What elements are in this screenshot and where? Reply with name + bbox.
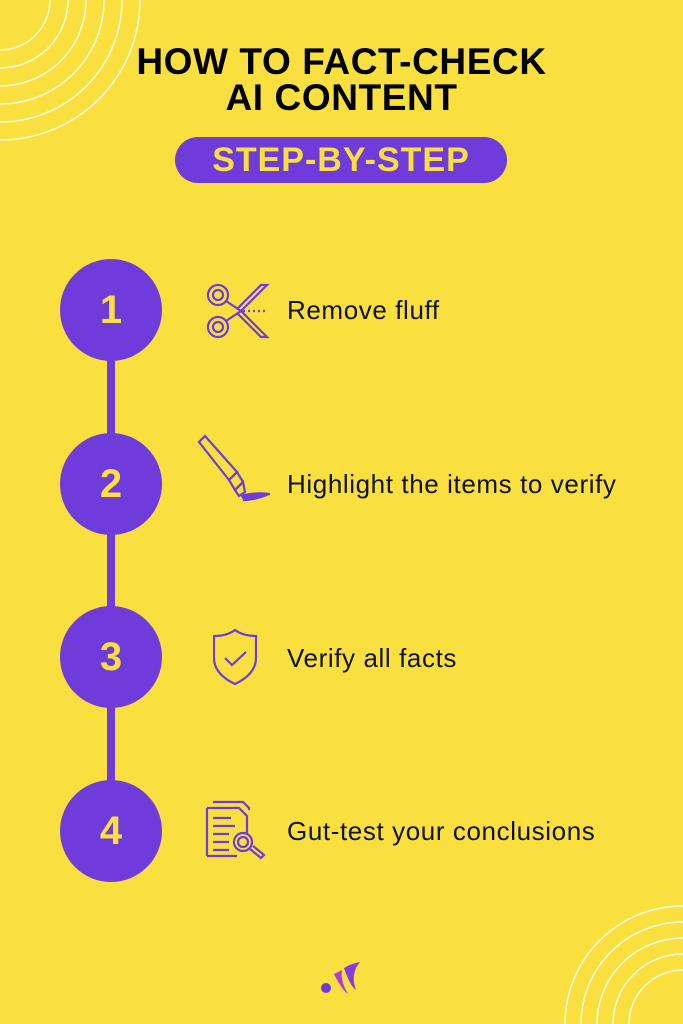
title: HOW TO FACT-CHECK	[136, 41, 547, 82]
step 4 circle	[60, 780, 162, 882]
title	[136, 41, 547, 118]
logo	[321, 962, 360, 994]
icon: shield check	[213, 628, 258, 686]
step 2 label: Highlight the items to verify	[287, 469, 617, 499]
icon: highlighter	[198, 434, 270, 502]
subtitle pill: STEP-BY-STEP	[212, 141, 470, 179]
step 1 label: Remove fluff	[287, 295, 440, 325]
icon: scissors	[206, 284, 270, 338]
step 1 circle: 1	[100, 288, 122, 332]
title: AI CONTENT	[225, 77, 458, 118]
step 1 circle	[60, 259, 162, 361]
step 3 circle	[60, 606, 162, 708]
step 3 circle: 3	[100, 635, 122, 679]
step 2 circle: 2	[100, 462, 122, 506]
icon: document search	[206, 800, 266, 860]
subtitle pill	[175, 137, 507, 183]
step 2 circle	[60, 433, 162, 535]
step 4 circle: 4	[100, 809, 122, 853]
step 3 label: Verify all facts	[287, 643, 457, 673]
step 4 label: Gut-test your conclusions	[287, 816, 595, 846]
